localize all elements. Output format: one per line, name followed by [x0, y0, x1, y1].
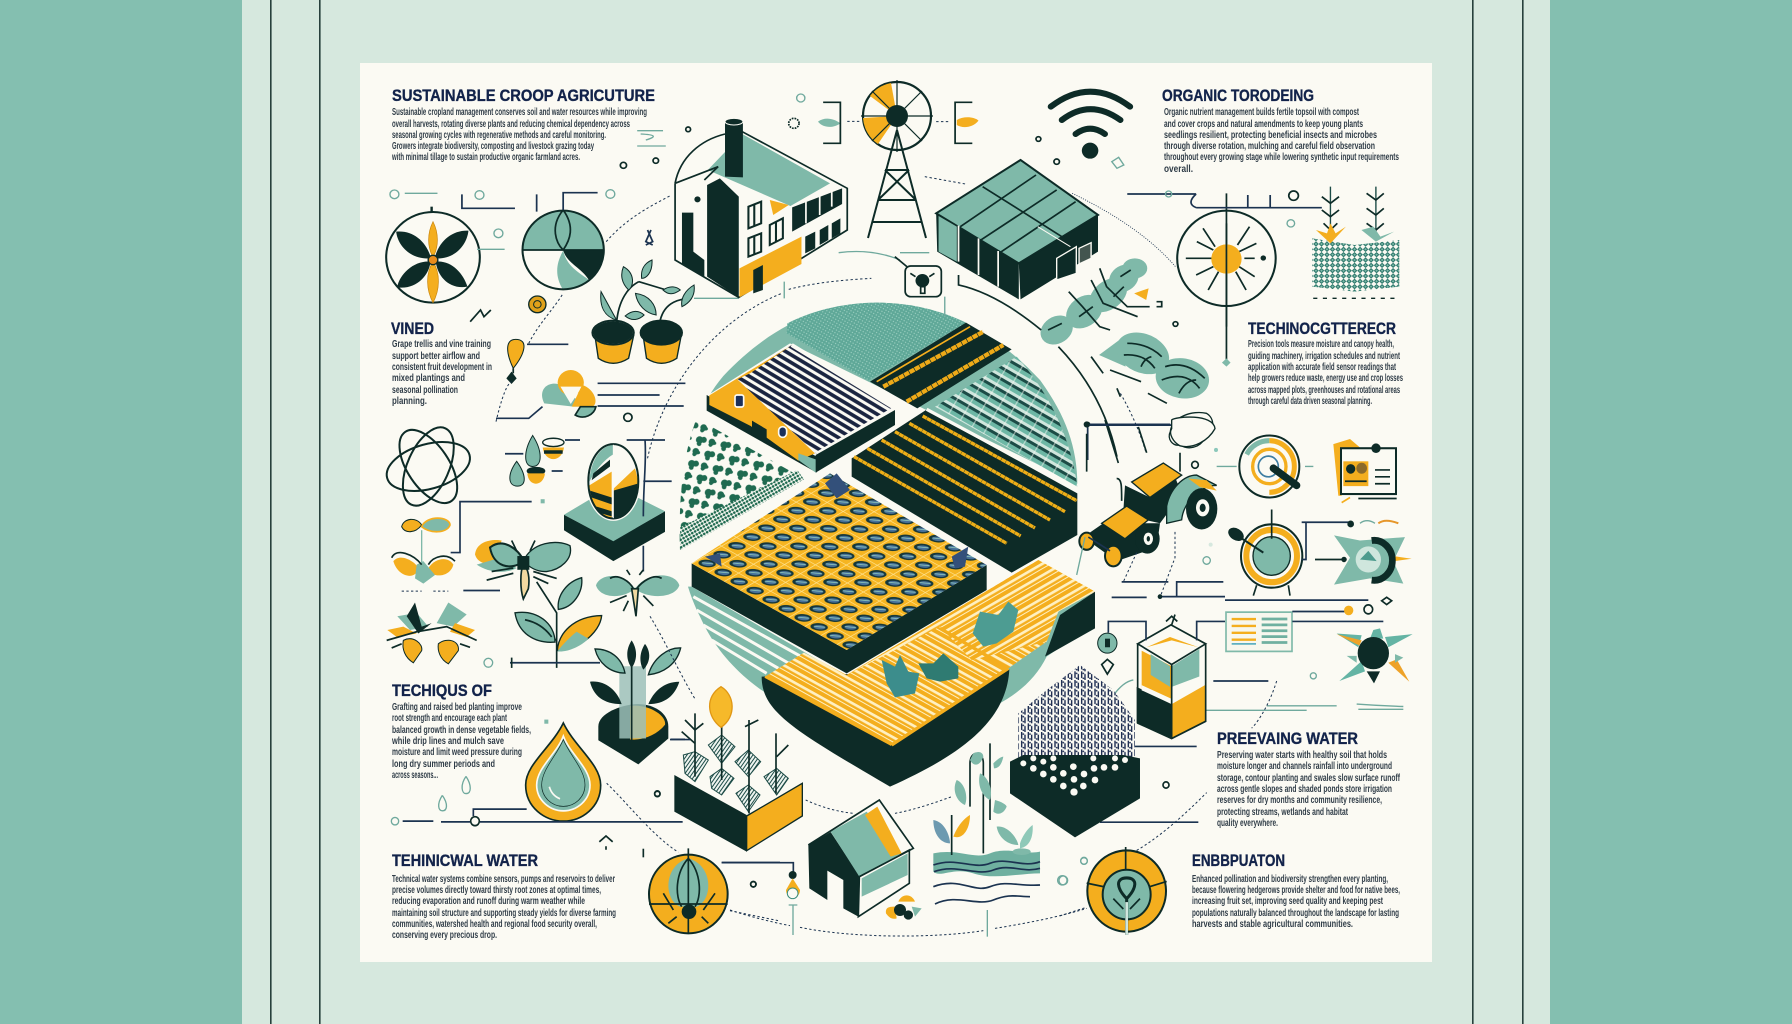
- dark crop rows: [852, 409, 1077, 573]
- text block: enbbpuaton: Enhanced pollination and biodiversity strengthen every planting,: [1192, 874, 1388, 885]
- icon: water plants: [933, 743, 1040, 904]
- icon: flower compass: [386, 207, 480, 303]
- text block: organic torodeing: ORGANIC TORODEING: [1162, 87, 1314, 105]
- dotted field: [787, 303, 966, 381]
- icon: leafy stem: [510, 578, 602, 668]
- text block: technocgetterecr: help growers reduce waste, energy use and crop losses: [1248, 373, 1403, 384]
- icon: seedling lattice bed: [1312, 187, 1399, 298]
- text block: technical water: [392, 852, 616, 941]
- text block: enbbpuaton: increasing fruit set, improving seed quality and keeping pest: [1192, 896, 1383, 907]
- text block: vined: [391, 320, 492, 407]
- icon: dotted tree planter: [1010, 665, 1140, 837]
- text block: enbbpuaton: populations naturally balanced throughout the landscape for lasting: [1192, 908, 1399, 919]
- text block: preserving water: storage, contour planting and swales slow surface runoff: [1217, 773, 1400, 784]
- text block: vined: seasonal pollination: [392, 385, 458, 396]
- icon: sun flower: [1337, 628, 1413, 683]
- icon: water drop: [526, 720, 601, 821]
- thought cloud connector: [1085, 412, 1213, 460]
- icon: venn cloud: [496, 370, 685, 418]
- icon: wifi signal: [1036, 92, 1130, 168]
- text block: techiqus of: long dry summer periods and: [392, 759, 495, 770]
- annotation lines and dots: [390, 127, 691, 421]
- icon: barn house: [808, 800, 913, 917]
- text block: sustainable crop agriculture: overall harvests, rotating diverse plants and reducing chemical dependency across: [392, 119, 630, 130]
- dashed bottom arcs: [730, 797, 1087, 936]
- icon: coil: [529, 296, 546, 313]
- icon: spider disc: [649, 791, 756, 933]
- bottom row of icons: [649, 665, 1140, 937]
- text block: techiqus of: TECHIQUS OF: [392, 682, 492, 700]
- text block: vined: planning.: [392, 396, 427, 407]
- text block: enbbpuaton: ENBBPUATON: [1192, 852, 1285, 870]
- icon: bulb badge: [895, 253, 945, 317]
- text block: organic torodeing: throughout every growing stage while lowering synthetic input requirements: [1164, 152, 1399, 163]
- text block: enbbpuaton: because flowering hedgerows provide shelter and food for native bees,: [1192, 885, 1400, 896]
- text block: preserving water: across gentle slopes and shaded ponds store irrigation: [1217, 784, 1392, 795]
- text block: sustainable crop agriculture: with minimal tillage to sustain productive organic farmland acres.: [391, 152, 580, 163]
- icon: atom rings: [382, 419, 475, 514]
- icon: butterfly one: [475, 540, 571, 599]
- icon: report card: [1226, 597, 1392, 651]
- icon: pie diagram: [523, 210, 604, 290]
- text block: organic torodeing: overall.: [1164, 164, 1193, 175]
- barn: [707, 345, 895, 473]
- icon: balloon marker: [506, 339, 568, 384]
- connector grid: [1077, 532, 1403, 788]
- water line with small marks: [391, 616, 780, 921]
- text block: organic torodeing: [1162, 87, 1399, 175]
- dashed links: [496, 195, 900, 458]
- text block: vined: support better airflow and: [392, 351, 480, 362]
- text block: vined: consistent fruit development in: [392, 362, 492, 373]
- icon: ring gauge: [1214, 435, 1313, 497]
- text block: organic torodeing: and cover crops and natural amendments to keep young plants: [1164, 119, 1363, 130]
- text block: preserving water: [1217, 730, 1400, 829]
- left column icons: [382, 419, 780, 921]
- text block: vined: VINED: [391, 320, 434, 338]
- icon: sprout moth upper: [392, 499, 545, 591]
- icon: teal star: [1315, 535, 1412, 585]
- icon: bee: [886, 895, 922, 920]
- icon: hanging cube: [1098, 615, 1225, 850]
- text block: technocgetterecr: TECHINOCGTTERECR: [1248, 320, 1396, 338]
- text block: techiqus of: root strength and encourage each plant: [392, 713, 507, 724]
- leafy field: [680, 418, 804, 550]
- text block: organic torodeing: through diverse rotation, mulching and careful field observation: [1164, 141, 1375, 152]
- teal white stripes: [693, 597, 800, 673]
- icon: sun dial: [925, 177, 1322, 457]
- icon: planter with herbs: [671, 687, 802, 852]
- text block: organic torodeing: Organic nutrient management builds fertile topsoil with compost: [1164, 107, 1359, 118]
- text block: vined: mixed plantings and: [392, 373, 465, 384]
- icon: drops and cups: [505, 435, 580, 486]
- text block: technical water: reducing evaporation and runoff during warm weather while: [392, 896, 585, 907]
- central isometric farm: [663, 303, 1097, 787]
- icon: right bracket with gold leaf: [936, 102, 979, 143]
- teal disc: [678, 303, 1095, 737]
- text block: technical water: conserving every precious drop.: [392, 930, 497, 941]
- icon: farmhouse: [675, 118, 847, 297]
- text block: preserving water: reserves for dry months and community resilience,: [1217, 795, 1382, 806]
- gold striped field: [870, 323, 1012, 408]
- icon: lamp connector: [722, 858, 1087, 937]
- text block: preserving water: moisture longer and channels rainfall into underground: [1217, 761, 1392, 772]
- text block: sustainable crop agriculture: Sustainable cropland management conserves soil and water resources while improving: [392, 107, 647, 118]
- text block: technocgetterecr: application with accurate field sensor readings that: [1248, 362, 1396, 373]
- cream gaps between plots: [663, 343, 1097, 677]
- text block: preserving water: Preserving water starts with healthy soil that holds: [1217, 750, 1387, 761]
- text block: techiqus of: moisture and limit weed pressure during: [392, 747, 522, 758]
- text block: vined: Grape trellis and vine training: [392, 339, 491, 350]
- icon: windmill: [861, 80, 933, 238]
- gold crop tray: [692, 473, 987, 673]
- right column machinery: [1059, 417, 1413, 935]
- icon: dial with handle: [1226, 510, 1398, 596]
- text block: technical water: communities, watershed health and regional food security overall,: [392, 919, 597, 930]
- icon: bracketed gear and leaf: [789, 94, 859, 143]
- text block: techiqus of: balanced growth in dense vegetable fields,: [392, 725, 531, 736]
- text block: technocgetterecr: Precision tools measure moisture and canopy health,: [1248, 339, 1394, 350]
- text block: sustainable crop agriculture: Growers integrate biodiversity, composting and livestock grazing today: [392, 141, 594, 152]
- text block: techiqus of: while drip lines and mulch save: [391, 736, 504, 747]
- text block: sustainable crop agriculture: [391, 87, 655, 163]
- icon: tree disc: [1059, 847, 1167, 935]
- text block: enbbpuaton: [1192, 852, 1400, 930]
- icon: egg on tile: [564, 440, 672, 572]
- text block: techiqus of: across seasons...: [392, 770, 438, 781]
- icon: pot with leaves: [590, 640, 690, 764]
- text block: preserving water: PREEVAING WATER: [1217, 730, 1358, 748]
- text block: sustainable crop agriculture: SUSTAINABLE CROOP AGRICUTURE: [392, 87, 655, 105]
- icon: butterfly two: [596, 570, 679, 616]
- icon: sprout moth lower: [387, 603, 493, 667]
- teal striped field: [935, 357, 1077, 487]
- text block: enbbpuaton: harvests and stable agricultural communities.: [1192, 919, 1353, 930]
- text block: organic torodeing: seedlings resilient, protecting beneficial insects and microbes: [1164, 130, 1377, 141]
- plant leaves: [882, 602, 1018, 697]
- text block: preserving water: quality everywhere.: [1217, 818, 1278, 829]
- icon: tractor: [1079, 417, 1217, 566]
- text block: technocgetterecr: guiding machinery, irrigation schedules and nutrient: [1248, 351, 1400, 362]
- text block: preserving water: protecting streams, wetlands and habitat: [1217, 807, 1348, 818]
- text block: technocgetterecr: [1248, 320, 1403, 407]
- text block: technical water: maintaining soil structure and supporting steady yields for diverse farming: [392, 908, 616, 919]
- flower compass and pie diagrams: [386, 94, 900, 458]
- text block: technocgetterecr: through careful data driven seasonal planning.: [1248, 396, 1372, 407]
- text block: sustainable crop agriculture: seasonal growing cycles with regenerative methods and careful monitoring.: [392, 130, 606, 141]
- panel: main sheet: [360, 63, 1432, 962]
- golden L-shaped bed: [762, 560, 1095, 787]
- text block: technical water: precise volumes directly toward thirsty root zones at optimal times,: [392, 885, 601, 896]
- icon: potted seedlings: [592, 260, 694, 363]
- text block: techiqus of: Grafting and raised bed planting improve: [392, 702, 522, 713]
- text block: technocgetterecr: across mapped plots, greenhouses and rotational areas: [1248, 385, 1400, 396]
- icon: clipboard report: [1333, 439, 1397, 503]
- text block: technical water: Technical water systems combine sensors, pumps and reservoirs to deliver: [392, 874, 615, 885]
- text block: techiqus of: [391, 682, 531, 781]
- icon: caterpillar and pods: [1035, 258, 1212, 403]
- icon: greenhouse shed: [936, 160, 1098, 299]
- text block: technical water: TEHINICWAL WATER: [392, 852, 538, 870]
